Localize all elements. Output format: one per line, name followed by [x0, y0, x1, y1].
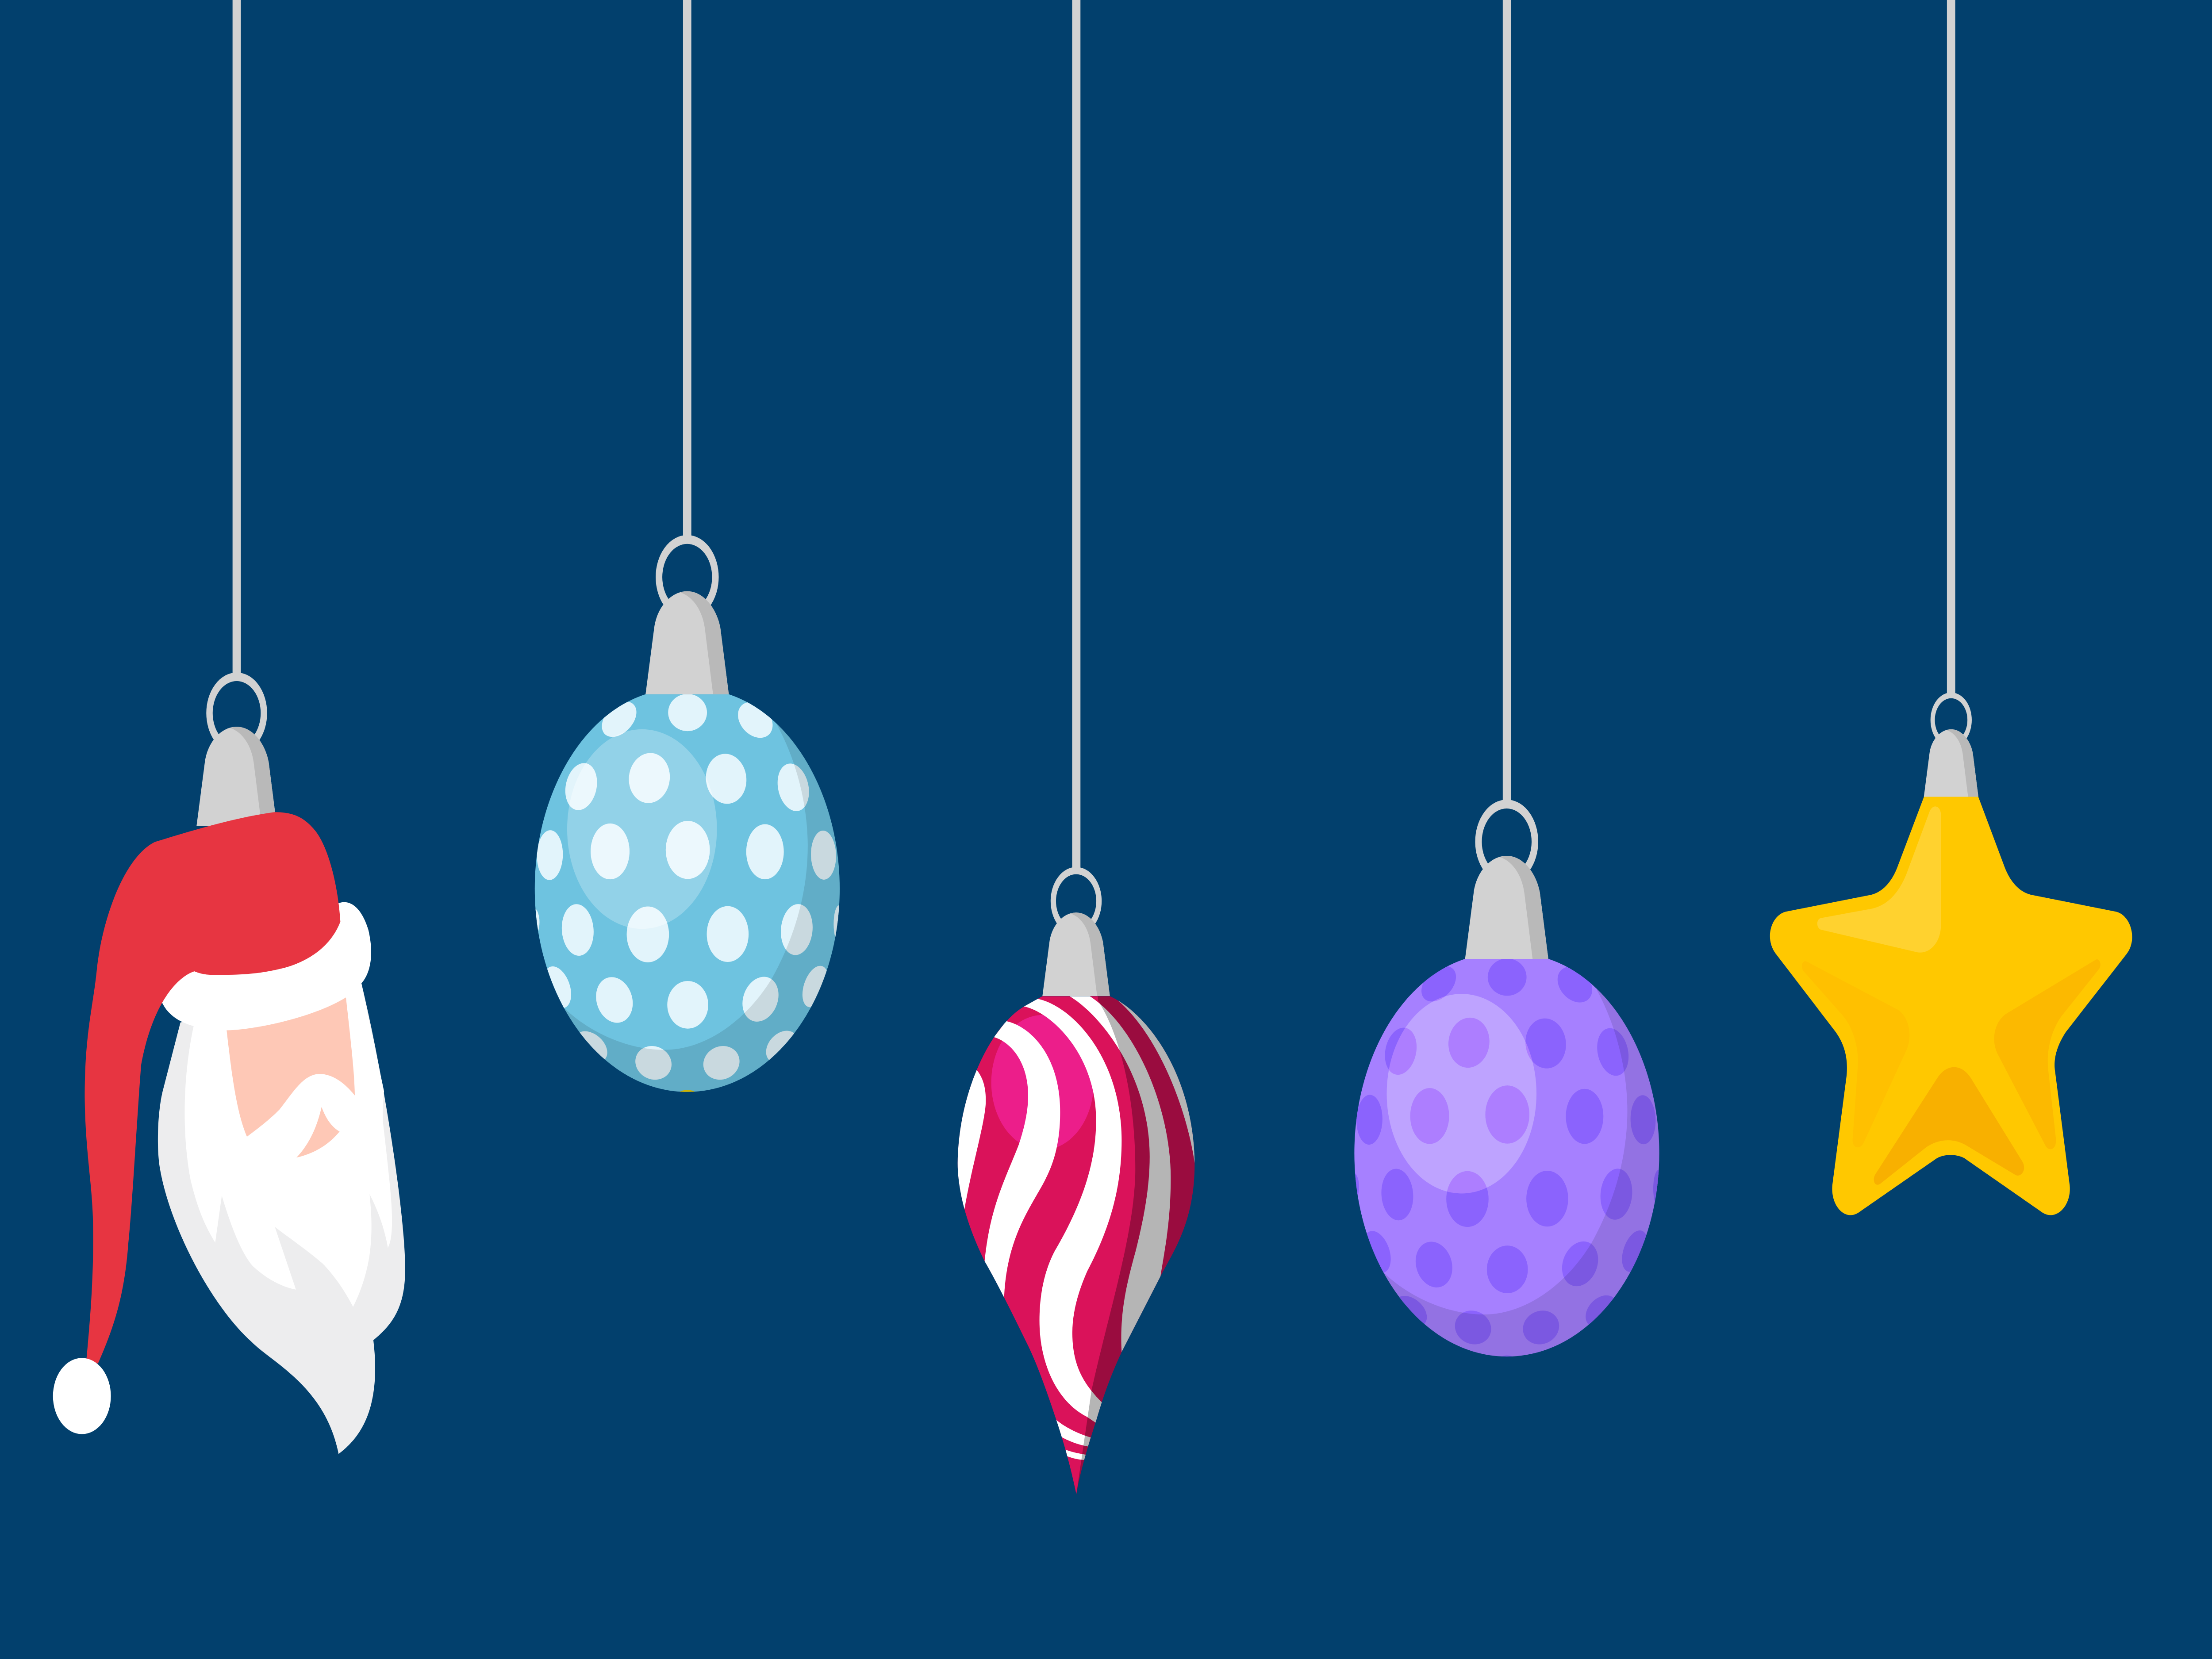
string: purple ball [1503, 0, 1511, 803]
star highlight [1817, 806, 1941, 953]
string: swirl drop [1072, 0, 1080, 874]
star bottom shade [1874, 1067, 2024, 1185]
beard shadow [158, 983, 405, 1454]
star right shade [1994, 959, 2101, 1149]
string: blue ball [683, 0, 691, 537]
hat trim [161, 902, 371, 1030]
cap: star [1924, 695, 1978, 797]
ornament: purple polka-dot ball [1345, 0, 1671, 1382]
ball: blue [534, 694, 840, 1092]
star body [1770, 797, 2132, 1215]
cap: Santa [196, 677, 277, 826]
pompom [53, 1358, 111, 1434]
ornament: red and white swirl drop [957, 0, 1194, 1494]
string: star [1947, 0, 1955, 697]
beard [184, 983, 392, 1307]
ornament: blue polka-dot ball [526, 0, 852, 1118]
ball: purple [1354, 959, 1659, 1357]
Santa figure [53, 812, 405, 1454]
cap: swirl drop [1042, 870, 1110, 996]
cap: purple ball [1465, 804, 1548, 959]
cap: blue ball [645, 540, 729, 694]
star left shade [1802, 961, 1909, 1147]
hat [84, 812, 340, 1364]
ornament: yellow star [1770, 0, 2132, 1215]
drop body [957, 996, 1194, 1494]
string: Santa [233, 0, 241, 677]
ornament: Santa head [53, 0, 405, 1454]
mouth [296, 1107, 340, 1157]
face [227, 997, 355, 1137]
